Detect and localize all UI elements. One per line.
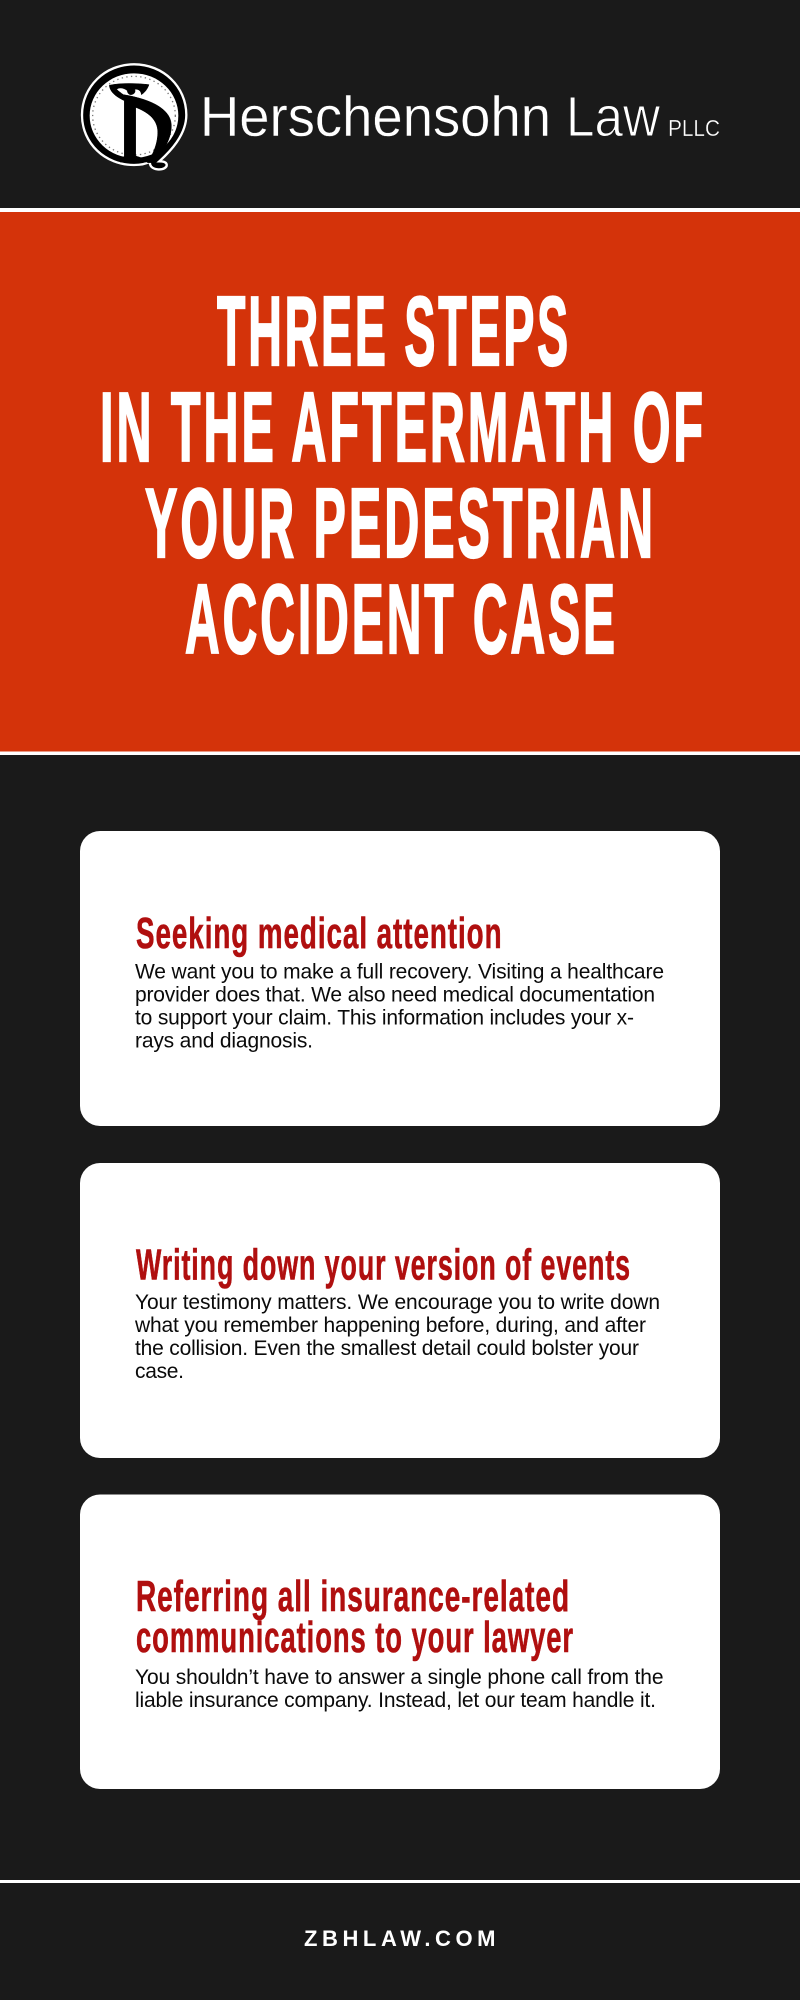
logo wordmark: Herschensohn [200,85,551,148]
card body text [135,960,664,1052]
header: logo [82,64,720,169]
card body text [135,1666,664,1712]
panel: seeking medical attention [80,831,720,1126]
card body text: provider does that. We also need medical documentation [135,984,655,1006]
card body text: to support your claim. This information includes your x- [135,1006,634,1030]
card body text: liable insurance company. Instead, let our team handle it. [135,1689,656,1712]
panel: writing down your version of events [80,1163,720,1458]
card body text: Your testimony matters. We encourage you to write down [135,1291,660,1314]
title [100,276,706,674]
top white divider and red title panel [0,208,800,755]
footer website: ZBHLAW.COM [304,1926,496,1951]
card heading: Referring all insurance-related [136,1572,570,1621]
logo wordmark: Law [566,85,660,148]
card heading [136,1572,574,1662]
footer divider [0,1880,800,1883]
card body text: We want you to make a full recovery. Visiting a healthcare [135,960,664,984]
card body text [134,1291,660,1383]
card body text: the collision. Even the smallest detail could bolster your [135,1337,639,1360]
logo wordmark: PLLC [668,115,720,141]
icon: monogram seal [82,64,186,169]
panel: referring insurance communications [80,1494,720,1789]
card heading: Seeking medical attention [136,909,502,958]
card body text: You shouldn’t have to answer a single phone call from the [135,1666,664,1689]
card body text: what you remember happening before, during, and after [134,1314,646,1337]
card body text: rays and diagnosis. [135,1030,313,1052]
card body text: case. [135,1360,184,1383]
